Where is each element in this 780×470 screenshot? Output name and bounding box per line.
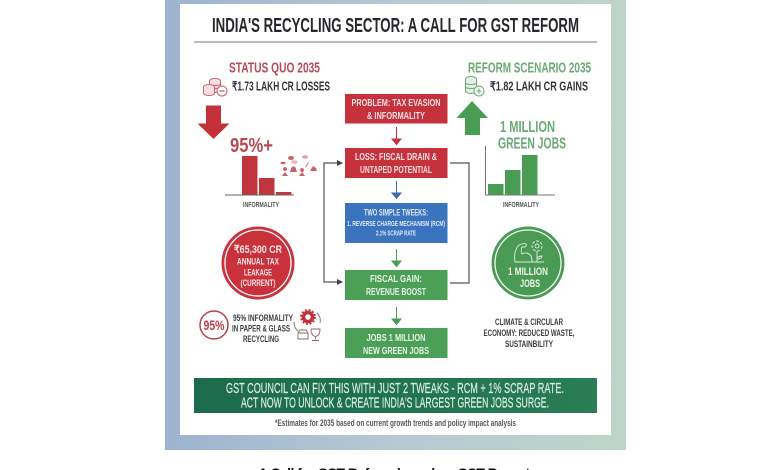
bar chart: green jobs up: [485, 146, 555, 196]
box: fiscal gain: FISCAL GAIN:: [370, 273, 422, 285]
panel: status quo: [198, 60, 330, 345]
banner: call to action: [194, 378, 597, 413]
losses figure: ₹1.73 LAKH CR LOSSES: [232, 80, 330, 94]
callout: tax leakage badge: ₹65,300 CR: [234, 244, 282, 256]
box: problem: PROBLEM: TAX EVASION: [352, 97, 440, 109]
climate text: CLIMATE & CIRCULAR: [495, 317, 563, 328]
icon: coins with plus: [466, 76, 484, 96]
icon: coins with minus: [204, 78, 227, 96]
box: loss: LOSS: FISCAL DRAIN &: [355, 151, 437, 163]
banner: call to action: GST COUNCIL CAN FIX THIS WITH JUST 2 TWEAKS - RCM + 1% SCRAP RATE.: [226, 380, 564, 397]
reform heading: REFORM SCENARIO 2035: [468, 60, 591, 76]
box: two simple tweaks: [345, 203, 448, 243]
callout: tax leakage badge: (CURRENT): [240, 278, 276, 289]
bar chart: informality down: [225, 156, 294, 196]
green jobs heading: 1 MILLION: [500, 119, 555, 136]
box: jobs: NEW GREEN JOBS: [363, 345, 429, 357]
bar chart label: INFORMALITY: [243, 200, 279, 209]
green jobs heading: [498, 119, 566, 152]
climate text: SUSTAINBILITY: [505, 339, 553, 350]
icon: gear, box and glass: [294, 310, 320, 340]
banner: call to action: ACT NOW TO UNLOCK & CREATE INDIA'S LARGEST GREEN JOBS SURGE.: [241, 394, 549, 412]
box: two simple tweaks: 1. REVERSE CHARGE MECHANISM (RCM): [347, 221, 445, 228]
arrow: gain to jobs: [392, 307, 401, 324]
climate text: ECONOMY: REDUCED WASTE,: [484, 328, 574, 339]
callout: tax leakage badge: LEAKAGE: [244, 268, 272, 278]
bar chart label: INFORMALITY: [503, 200, 539, 209]
icon: 95 percent stamp: [200, 311, 228, 339]
box: problem: [345, 94, 448, 124]
paper and glass text: [232, 313, 293, 345]
icon: arm and flower: [515, 241, 544, 262]
panel: reform scenario: [456, 60, 591, 350]
box: loss: [345, 148, 448, 178]
callout: jobs badge: [492, 226, 564, 300]
gains figure: ₹1.82 LAKH CR GAINS: [490, 80, 588, 94]
arrow: down: [198, 106, 230, 139]
connector: left loop arrow: [324, 160, 343, 285]
arrow: up: [456, 101, 488, 135]
box: jobs: [345, 328, 448, 358]
white card: [180, 4, 611, 435]
callout: jobs badge: 1 MILLION: [508, 266, 548, 278]
box: two simple tweaks: 2.1% SCRAP RATE: [376, 230, 416, 238]
callout: tax leakage badge: [222, 226, 294, 300]
green jobs heading: GREEN JOBS: [498, 136, 566, 152]
box: problem: & INFORMALITY: [367, 110, 425, 122]
box: fiscal gain: [345, 270, 448, 300]
arrow: problem to loss: [392, 127, 401, 144]
climate text: [484, 317, 574, 350]
informality percentage: 95%+: [230, 135, 273, 157]
callout: tax leakage badge: ANNUAL TAX: [237, 256, 279, 268]
footnote: *Estimates for 2035 based on current growth trends and policy impact analysis: [275, 418, 516, 428]
icon: scattered waste and workers: [280, 155, 317, 176]
paper and glass text: IN PAPER & GLASS: [232, 324, 290, 334]
status quo heading: STATUS QUO 2035: [229, 60, 320, 76]
icon: 95 percent stamp: 95%: [204, 317, 225, 333]
connector: right loop line: [450, 163, 469, 283]
box: loss: UNTAPED POTENTIAL: [360, 164, 432, 176]
box: jobs: JOBS 1 MILLION: [366, 332, 426, 344]
panel: flow chart: [324, 94, 469, 358]
paper and glass text: RECYCLING: [243, 334, 279, 345]
arrow: tweaks to gain: [392, 249, 401, 266]
box: fiscal gain: REVENUE BOOST: [366, 286, 426, 298]
background frame: [165, 0, 626, 450]
box: two simple tweaks: TWO SIMPLE TWEEKS:: [364, 208, 428, 218]
arrow: loss to tweaks: [392, 181, 401, 198]
paper and glass text: 95% INFORMALITY: [233, 313, 293, 324]
title: INDIA'S RECYCLING SECTOR: A CALL FOR GST REFORM: [212, 15, 579, 37]
callout: jobs badge: JOBS: [520, 278, 540, 290]
